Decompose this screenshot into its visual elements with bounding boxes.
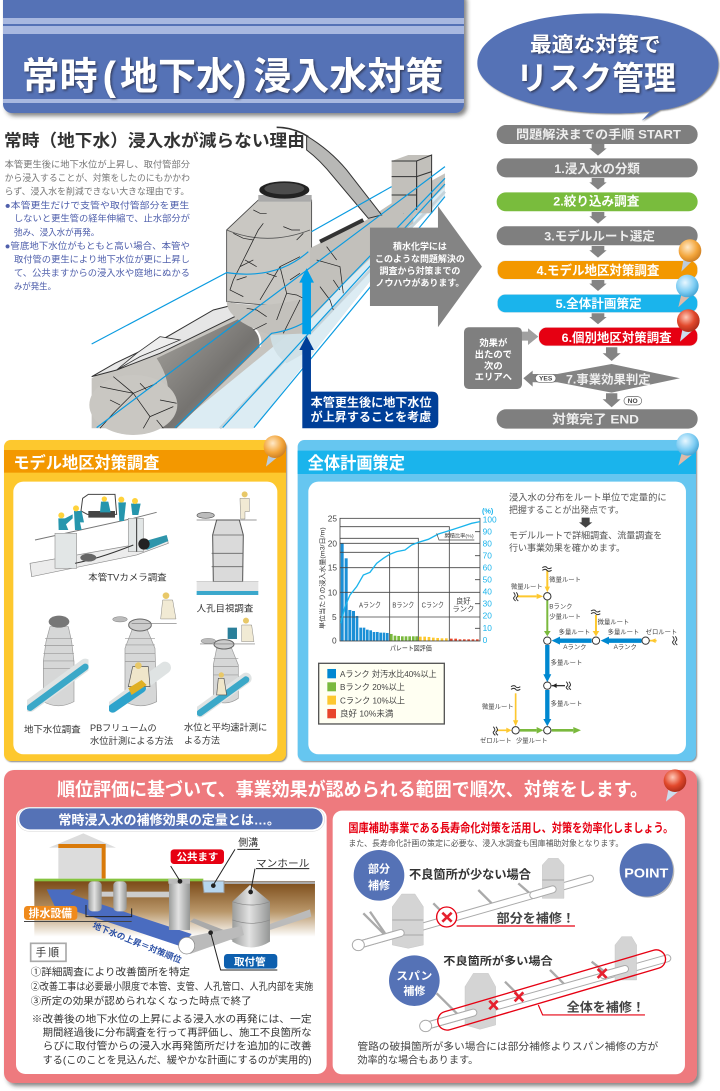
pareto chart: Cランク (422, 601, 444, 610)
text: route analysis (509, 492, 667, 553)
route diagram: Aランク (563, 643, 587, 651)
route diagram: Bランク (549, 603, 573, 611)
pareto chart: 100 (483, 515, 497, 525)
step 6 (539, 327, 698, 346)
title banner (3, 0, 464, 113)
step 7 decision: 7.事業効果判定 (566, 371, 651, 386)
title: ( (103, 54, 117, 98)
title: 地下水 (120, 56, 234, 98)
badge: span repair (389, 955, 440, 1006)
label: groundwater survey: 地下水位調査 (24, 723, 81, 734)
label: public basin: 公共ます (177, 851, 218, 864)
subpanel: repair effect (16, 807, 327, 1074)
step 1: 1.浸入水の分類 (554, 161, 641, 176)
label: velocity method: よる方法 (184, 734, 220, 745)
badge: span repair: スパン (396, 969, 432, 982)
reason paragraph: て、公共ますからの浸入水や庭地にぬかる (14, 267, 190, 278)
pareto chart: (%) (482, 506, 494, 515)
label: rising groundwater: 地下水の上昇＝対策順位 (91, 919, 184, 965)
blue guide lines (92, 167, 445, 428)
route diagram: ゼロルート (480, 735, 512, 744)
flow chart column (464, 13, 718, 429)
legend: Bランク 20%以上 (340, 682, 405, 692)
legend: Cランク 10%以上 (340, 695, 405, 705)
illustration: groundwater survey (30, 616, 85, 708)
title: 常時 (22, 56, 98, 98)
legend: Aランク 対汚水比40%以上 (340, 669, 437, 679)
route diagram: 多量ルート (559, 627, 590, 636)
panel: model district survey (4, 435, 286, 761)
arrow callout: know-how (370, 206, 482, 327)
route diagram (480, 567, 677, 744)
step 4: 4.モデル地区対策調査 (537, 263, 659, 278)
step: end (497, 409, 698, 429)
badge: point: POINT (624, 866, 669, 880)
footnote: 効率的な場合もあります。 (357, 1053, 478, 1066)
step 5 (497, 294, 698, 313)
manhole (227, 200, 312, 307)
illustration: groundwater cross-section (24, 833, 315, 970)
pareto chart: 40 (483, 587, 492, 597)
procedure text: ②改善工事は必要最小限度で本管、支管、人孔管口、人孔内部を実施 (31, 980, 313, 993)
step 5: 5.全体計画策定 (556, 296, 642, 311)
step 7 decision: YES (539, 376, 553, 383)
heading: overall plan: 全体計画策定 (308, 453, 405, 473)
route diagram: 微量ルート (482, 701, 514, 710)
pareto chart: 30 (483, 599, 492, 609)
pareto chart: パレート図評価 (390, 644, 432, 653)
pareto chart: 10 (328, 587, 337, 597)
heading: ranked evaluation: 順位評価に基づいて、事業効果が認められる範囲で順次、対策をします。 (57, 779, 648, 800)
arrow callout: know-how: ノウハウがあります。 (375, 277, 464, 288)
section: reason text and pipe illustration (4, 127, 482, 435)
arrow: into step 6 (522, 328, 538, 345)
pin: red (677, 309, 700, 342)
pin: red (664, 769, 686, 802)
pareto chart: ランク (452, 604, 474, 613)
label: velocity method (184, 722, 267, 745)
illustration: partial repair (352, 858, 590, 951)
heading: model district: モデル地区対策調査 (13, 452, 160, 472)
procedure text: らびに取付管からの浸入水再発箇所だけを追加的に改善 (43, 1040, 312, 1053)
label: PB flume method: PBフリュームの (90, 723, 157, 733)
reason paragraph: から浸入することが、対策をしたのにもかかわ (5, 172, 190, 183)
arrows between steps (589, 144, 621, 407)
route diagram: 多量ルート (551, 698, 582, 707)
procedure box (31, 943, 66, 961)
arrow: light blue water rise (299, 268, 314, 334)
reason paragraph (5, 158, 191, 291)
procedure box: 手順 (36, 946, 61, 959)
label: many defects: 不良箇所が多い場合 (443, 953, 553, 967)
pareto chart: 20 (483, 611, 492, 621)
pin: orange (264, 435, 286, 467)
arrow: down (579, 518, 592, 528)
step 1 (497, 158, 698, 177)
illustration: span repair (420, 937, 668, 1032)
illustration: PB flume (113, 592, 177, 708)
text: route analysis: 浸入水の分布をルート単位で定量的に (509, 492, 667, 503)
label: service pipe (224, 954, 277, 969)
pareto chart: 80 (483, 539, 492, 549)
route diagram: Aランク (614, 643, 637, 651)
step 3 (497, 226, 698, 245)
procedure text: ※改善後の地下水位の上昇による浸入水の再発には、一定 (32, 1012, 312, 1025)
reason paragraph: しないと更生管の経年伸縮で、止水部分が (14, 213, 191, 224)
step: start (497, 125, 698, 144)
pareto chart (318, 506, 497, 653)
pareto chart: 単位当たりの浸入水量(m3/日/m) (318, 527, 327, 629)
illustration: water level and velocity (200, 618, 255, 713)
label: TV survey: 本管TVカメラ調査 (88, 571, 167, 582)
badge: span repair: 補修 (403, 983, 425, 997)
speech bubble: risk management: リスク管理 (516, 59, 676, 96)
pareto chart: 20 (328, 538, 337, 548)
box: next area: 効果が (479, 337, 508, 348)
box: next area: 出たので (475, 348, 512, 359)
pin: blue (676, 433, 699, 466)
step: end: 対策完了 END (552, 411, 639, 426)
arrow callout: know-how: 積水化学には (393, 241, 447, 252)
label: public basin (171, 849, 224, 864)
step 6: 6.個別地区対策調査 (562, 330, 672, 345)
pareto chart: 0 (332, 635, 337, 645)
illustration: TV camera survey (30, 494, 168, 577)
text: route analysis: モデルルートで詳細調査、流量調査を (509, 530, 662, 541)
pareto chart: 70 (483, 551, 492, 561)
subpanel: subsidised repair (333, 769, 686, 1074)
step: start: 問題解決までの手順 START (516, 126, 682, 141)
red heading: 国庫補助事業である長寿命化対策を活用し、対策を効率化しましょう。 (348, 820, 673, 835)
reason paragraph: らず、浸入水を削減できない大きな理由です。 (5, 186, 189, 197)
label: drainage: 排水設備 (29, 907, 72, 920)
box: next area (464, 327, 522, 389)
footnote (357, 1040, 659, 1066)
pareto chart: 25 (328, 513, 337, 523)
route diagram: 多量ルート (608, 627, 639, 636)
box: next area: 次の (484, 360, 503, 371)
panel: ranked evaluation (4, 770, 697, 1083)
box: next area: エリアへ (475, 372, 512, 382)
title: ) (233, 54, 247, 98)
label: partial fix: 部分を補修！ (497, 911, 575, 926)
step 3: 3.モデルルート選定 (544, 228, 655, 243)
reason paragraph: みが発生。 (14, 280, 56, 291)
route diagram: 微量ルート (511, 581, 543, 590)
badge: partial repair: 補修 (368, 878, 390, 892)
procedure text: 期間経過後に分布調査を行って再評価し、施工不良箇所な (43, 1026, 312, 1039)
reason paragraph: ●管底地下水位がもともと高い場合、本管や (5, 240, 190, 251)
reason paragraph: 本管更生後に地下水位が上昇し、取付管部分 (5, 158, 191, 169)
pareto chart: 90 (483, 527, 492, 537)
route diagram: 微量ルート (549, 574, 581, 583)
text: route analysis: 行い事業効果を確かめます。 (509, 542, 625, 553)
title: 浸入水対策 (253, 56, 443, 98)
procedure text: ①詳細調査により改善箇所を特定 (31, 965, 190, 978)
pareto chart: 10 (483, 623, 492, 633)
pareto chart: Aランク (359, 601, 381, 610)
label: no: NO (628, 398, 638, 405)
label: full fix: 全体を補修！ (567, 1000, 645, 1015)
reason paragraph: 弛み、浸入水が再発。 (14, 226, 99, 237)
panel: overall plan (298, 433, 699, 761)
label: side ditch: 側溝 (238, 836, 258, 849)
cracks (100, 203, 407, 428)
label: velocity method: 水位と平均速計測に (184, 722, 267, 733)
route diagram: 微量ルート (598, 617, 629, 626)
pareto chart: 5 (332, 612, 337, 622)
route diagram: 多量ルート (551, 657, 582, 666)
block (392, 155, 432, 213)
callout: water level consideration: が上昇することを考慮 (311, 410, 432, 424)
label: PB flume method: 水位計測による方法 (90, 735, 173, 746)
speech bubble: risk management (477, 13, 718, 121)
pareto chart: 0 (483, 635, 488, 645)
label: drainage (24, 906, 77, 920)
badge: point (620, 843, 674, 898)
subheading pill: 常時浸入水の補修効果の定量とは…。 (58, 812, 280, 828)
pareto chart: 60 (483, 563, 492, 573)
pin: orange (679, 239, 701, 272)
step 2: 2.絞り込み調査 (553, 194, 639, 209)
label: service pipe: 取付管 (234, 955, 266, 968)
badge: partial repair: 部分 (368, 862, 390, 876)
procedure text: する(このことを見込んだ、緩やかな計画にするのが実用的) (43, 1053, 312, 1066)
speech bubble: risk management: 最適な対策で (530, 34, 661, 57)
text: route analysis: 把握することが出発点です。 (509, 504, 624, 515)
note: また、長寿命化計画の策定に必要な、浸入水調査も国庫補助対象となります。 (348, 838, 623, 848)
pareto chart: 良好 (456, 596, 471, 605)
pareto chart: Bランク (392, 601, 414, 610)
step 2 (497, 192, 698, 211)
arrow callout: know-how: 調査から対策までの (380, 265, 460, 276)
footnote: 管路の破損箇所が多い場合には部分補修よりスパン補修の方が (357, 1040, 659, 1053)
pareto chart: 累積比率(%) (444, 532, 474, 539)
legend: 良好 10%未満 (340, 708, 393, 718)
illustration: cracked pipe and manhole (89, 127, 445, 435)
label: few defects: 不良箇所が少ない場合 (409, 868, 531, 882)
arrow callout: know-how: このような問題解決の (375, 253, 465, 264)
step 4 (497, 261, 698, 279)
pareto chart: 15 (328, 563, 337, 573)
pin: blue (676, 275, 699, 307)
procedure text (31, 965, 313, 1066)
pareto chart: 50 (483, 575, 492, 585)
callout: water level consideration: 本管更生後に地下水位 (311, 396, 432, 410)
label: manhole: マンホール (256, 858, 309, 870)
step 7 decision (523, 364, 680, 393)
illustration: manhole visual survey (197, 491, 258, 595)
legend (319, 663, 444, 724)
chute (307, 136, 382, 218)
subheading pill (17, 807, 325, 831)
badge: partial repair (354, 850, 404, 901)
callout: water level consideration (299, 336, 438, 428)
route diagram: 少量ルート (549, 612, 581, 621)
reason paragraph: 取付管の更生により地下水位が更に上昇し (14, 254, 190, 265)
heading: reason: 常時（地下水）浸入水が減らない理由 (4, 131, 305, 151)
reason paragraph: ●本管更生だけで支管や取付管部分を更生 (5, 199, 189, 210)
label: manhole survey: 人孔目視調査 (197, 603, 253, 614)
procedure text: ③所定の効果が認められなくなった時点で終了 (31, 994, 252, 1007)
route diagram: 少量ルート (516, 735, 548, 744)
label: PB flume method (90, 723, 173, 746)
route diagram: ゼロルート (646, 627, 677, 636)
label: no (624, 397, 642, 405)
